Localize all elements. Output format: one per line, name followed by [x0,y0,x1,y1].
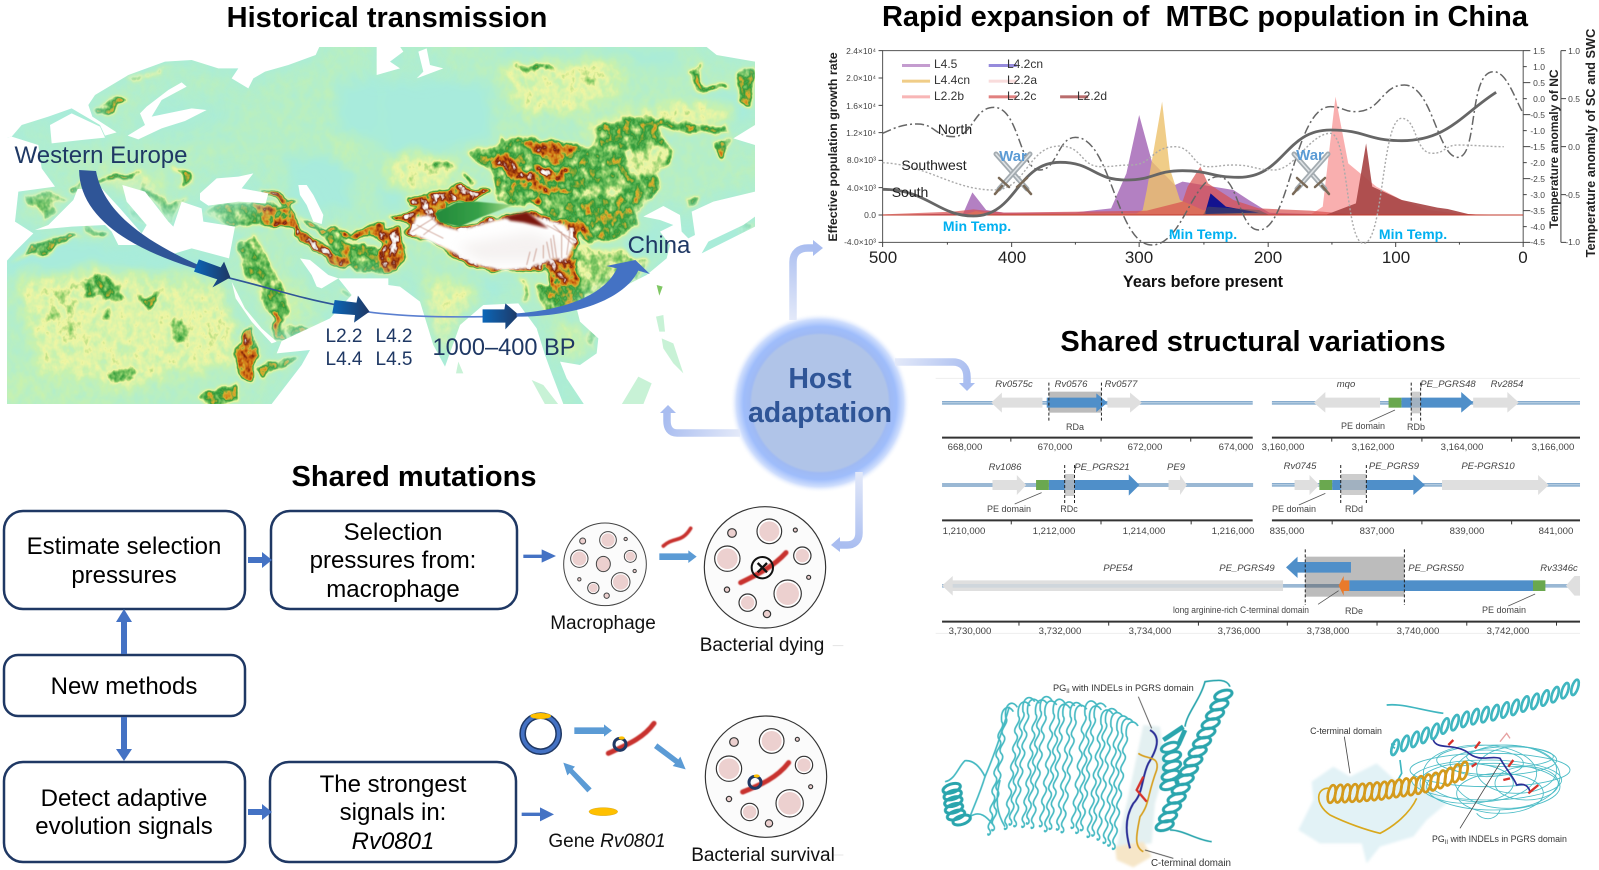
legend labels: L4.5 [934,57,958,71]
legend labels: L2.2a [1007,73,1037,87]
right axis 1 labels: 0.5 [1533,78,1545,88]
flow box: Selection pressures from macrophage: pressures from: [310,547,476,574]
coordinate labels: 3,738,000 [1307,626,1349,637]
coordinate labels: 3,166,000 [1532,442,1574,453]
northern brown block [505,212,548,228]
map label: Western Europe: Western Europe [14,142,188,169]
mint coastal bands [2,42,755,408]
oceans left half [2,42,388,408]
Tarim basin [435,202,513,227]
coordinate labels: 674,000 [1219,442,1253,453]
Iranian plateau [295,215,385,242]
coordinate labels: 1,210,000 [943,526,985,537]
surface blobs [1298,763,1447,863]
Balkans and Carpathians [137,187,185,225]
domain and region annotations: RDb [1407,422,1425,432]
legend labels [934,57,1107,103]
beta-coil strands [945,697,1138,849]
flow box: Estimate selection pressures: pressures [71,562,177,589]
gold C-terminal helix [1326,761,1469,804]
host adaptation text: Host [788,363,852,395]
block arrow 1 [194,259,230,287]
legend swatches [902,64,1088,98]
region label: Southwest: Southwest [901,157,967,173]
coordinate labels: 1,214,000 [1123,526,1165,537]
upper helix [1387,679,1580,785]
flow box: Estimate selection pressures: Estimate selection [27,533,221,560]
arrow: host to map [660,405,740,433]
islands of Southeast Asia [456,285,683,404]
flow arrow: box to box upper [248,552,272,568]
crossed swords 2 [1293,154,1329,194]
thin route line [228,278,485,317]
label pointers [1138,697,1173,858]
flow arrow: methods down [116,717,132,761]
coordinate labels: 1,216,000 [1212,526,1254,537]
coordinate labels: 3,734,000 [1129,626,1171,637]
right axis 1 labels [1530,46,1545,247]
left axis tick labels: -4.0×10³ [844,237,876,247]
gene names: Rv0577 [1105,379,1138,390]
Caucasus [258,189,300,206]
right axis 2 title: Temperature anomaly of SC and SWC [1583,29,1598,257]
left small helix [942,781,972,827]
gene names: PE-PGRS10 [1461,461,1515,472]
arrow to gene [522,807,554,821]
coordinate labels: 672,000 [1128,442,1162,453]
gene names: mqo [1337,379,1355,390]
zero line [883,214,1523,216]
right axis 2 labels [1565,46,1580,247]
left structure [942,680,1233,867]
x axis labels [869,248,1528,267]
coordinate labels: 3,736,000 [1218,626,1260,637]
title: Shared structural variations: Shared structural variations [1060,326,1446,358]
Anatolia [202,202,288,225]
gene names: PE_PGRS9 [1369,461,1420,472]
Karakoram fringe [390,205,437,223]
red residues [1448,740,1538,793]
right structure [1298,679,1580,863]
Yunnan and Burma [545,258,580,292]
label: PG with INDELs right: with INDELs in PGRS domain [1448,834,1567,844]
crossed swords 1 [995,154,1031,194]
coordinate labels: 668,000 [948,442,982,453]
flow box: The strongest signals [270,762,516,862]
domain and region annotations: PE domain [1272,504,1316,514]
Ethiopian highlands [232,322,260,382]
left axis tick labels: 8.0×10³ [847,155,876,165]
gene names: Rv3346c [1540,563,1578,574]
sweeping arrow from Western Europe [79,170,232,278]
flow box: New methods [4,655,245,716]
right axis 2 labels: -1.0 [1565,237,1580,247]
flow box: Selection pressures from macrophage: Selection [344,519,442,546]
right axis 1 labels: -3.0 [1530,190,1545,200]
chart: population growth rate and temperature anomaly [826,29,1598,291]
coordinate labels [943,442,1574,637]
left axis tick labels: 2.0×10⁴ [846,73,876,83]
Zagros [288,218,348,268]
Min Temp label 3: Min Temp. [1379,226,1447,242]
gene names: PE_PGRS49 [1219,563,1275,574]
Central China [577,195,640,242]
block arrow 3 [483,303,519,329]
Atlas [14,233,83,260]
gene names: PE_PGRS50 [1408,563,1464,574]
coordinate labels: 835,000 [1270,526,1304,537]
Siberian ranges [513,62,555,72]
coordinate labels: 3,162,000 [1352,442,1394,453]
Tibet and Tarim overlays [410,202,577,270]
right axis 1 labels: 0.0 [1533,94,1545,104]
oceans right half [377,42,755,408]
map label: lineages: L2.2 [326,326,362,347]
coordinate labels: 3,740,000 [1397,626,1439,637]
RDa [942,383,1253,421]
flow box: Selection pressures from macrophage [271,511,517,609]
left axis tick labels: 1.6×10⁴ [846,101,876,111]
broad lowland zones, left half [5,63,385,404]
right axis 1 labels: -3.5 [1530,206,1545,216]
Mongolia and north China highland [470,113,673,242]
left axis tick labels [844,46,876,247]
domain and region annotations: PE domain [1482,605,1526,615]
label: PG with INDELs left: PG [1053,683,1066,693]
legend labels: L2.2b [934,89,964,103]
legend labels: L4.4cn [934,73,970,87]
gold loop [1319,788,1417,833]
domain and region annotations: PE domain [1341,421,1385,431]
domain and region annotations: RDa [1066,422,1084,432]
map label: date: 1000–400 BP [432,334,576,361]
Min Temp label 1: Min Temp. [943,218,1011,234]
grey-white shading [457,232,567,262]
coordinate labels: 670,000 [1038,442,1072,453]
South China hills [570,242,647,298]
survival cell [705,716,827,837]
surface patches [1115,725,1165,867]
macrophage cell [564,523,646,606]
INDEL traces [1127,730,1157,852]
gene diagrams: structural variations [936,378,1580,637]
coordinate labels: 3,730,000 [949,626,991,637]
Altai and Hangai [482,153,557,188]
arrow to dying cell [659,550,697,563]
arrow: ring to bacterium [574,724,612,737]
coordinate labels: 839,000 [1450,526,1484,537]
Southwest temperature line [883,118,1504,243]
protein structures [942,679,1580,869]
right axis 1 labels: -4.0 [1530,222,1545,232]
x axis ticks and secondary axes [879,51,1566,247]
flow box: The strongest signals: The strongest [320,771,467,798]
terrain clip viewport [7,47,755,404]
coordinate labels: 3,732,000 [1039,626,1081,637]
left axis title: Effective population growth rate [826,52,840,242]
right axis 1 labels: -2.0 [1530,158,1545,168]
arrow: host to chart [793,240,823,320]
domain and region annotations: long arginine-rich C-terminal domain [1173,605,1309,615]
label: C-terminal left: C-terminal domain [1151,858,1231,869]
bacterium free [663,528,691,546]
flow box: Estimate selection pressures [4,511,245,609]
gene names: Rv0576 [1055,379,1088,390]
legend labels: L2.2d [1077,89,1107,103]
block arrow 2 [332,296,370,323]
map label: lineages [326,326,412,370]
label: PG with INDELs right: PG [1432,834,1445,844]
Scandinavian range [92,95,130,117]
x axis labels: 300 [1125,248,1153,267]
flow box: New methods: New methods [51,673,197,700]
left axis tick labels: 2.4×10⁴ [846,46,876,56]
faint side chain [1500,733,1510,742]
coordinate labels: 841,000 [1539,526,1573,537]
plasmid ring [523,713,559,752]
Saharan massifs [82,275,125,302]
white plateau [410,214,575,270]
gene names: Rv2854 [1491,379,1523,390]
left lobe strands [945,707,1009,782]
right axis 1 labels: 1.0 [1533,62,1545,72]
helix bundle [1155,680,1233,842]
title: Rapid expansion: Rapid expansion of MTBC population in China [882,1,1529,33]
domain and region annotations [987,421,1526,616]
right axis 2 labels: -0.5 [1565,190,1580,200]
domain and region annotations: RDd [1345,504,1363,514]
North temperature line [883,72,1523,245]
label: PG with INDELs left: with INDELs in PGRS domain [1070,683,1194,693]
right axis 1 title: Temperature anomaly of NC [1547,69,1561,229]
left axis tick labels: 4.0×10³ [847,183,876,193]
label: Bacterial dying: Bacterial dying [700,635,824,656]
label: PG with INDELs left: II [1066,689,1070,695]
map: Eurasia and Africa terrain with transmission route [0,0,820,450]
gene names: PPE54 [1103,563,1133,574]
widening arrow to China [517,260,650,317]
flow box: Selection pressures from macrophage: macrophage [326,576,460,603]
RDd [1272,465,1580,505]
elevation model rendered through colour ramp [0,0,820,450]
arrow: bacterium to survival cell [654,743,686,769]
host adaptation text: adaptation [748,397,892,429]
right half [380,50,754,362]
wire mesh [1410,745,1570,819]
Min Temp label 2: Min Temp. [1169,226,1237,242]
gene names [989,379,1578,574]
bacterium dying with cross [741,553,786,583]
map label: lineages: L4.4 [326,349,363,370]
label: PG with INDELs right: II [1445,840,1448,846]
Tien Shan [407,182,495,208]
domain and region annotations: PE domain [987,504,1031,514]
gene names: Rv0745 [1284,461,1317,472]
arrow: host to structural variations [895,362,975,391]
coordinate labels: 3,164,000 [1441,442,1483,453]
map label: China: China [628,232,691,259]
Alps [96,171,140,183]
frame lines [936,378,1580,633]
coordinate labels: 3,742,000 [1487,626,1529,637]
Hindu Kush and Pakistan [380,228,405,275]
plot frame [883,51,1523,242]
right axis 2 labels: 1.0 [1568,46,1580,56]
navy trace [1433,740,1530,792]
gene names: PE_PGRS21 [1074,462,1130,473]
gene names: PE9 [1167,462,1186,473]
flow arrow: box to box lower [248,804,272,820]
coordinate labels: 1,212,000 [1033,526,1075,537]
map label: lineages: L4.2 [376,326,412,347]
arrow: gene to ring [563,763,592,792]
right axis 1 labels: -1.0 [1530,126,1545,136]
flow box: The strongest signals: signals in: [340,799,446,826]
gene names: PE_PGRS48 [1420,379,1476,390]
right axis 2 labels: 0.5 [1568,94,1580,104]
flow box: Detect adaptive evolution signals: Detect adaptive [41,785,207,812]
scales row 1 [942,438,1580,442]
title: Historical transmission: Historical transmission [227,2,547,34]
RDc [942,465,1253,504]
War label 2: War [1296,147,1324,164]
bacterium with plasmid [608,723,654,753]
South temperature line [883,92,1496,216]
flow box: Detect adaptive evolution signals: evolution signals [35,813,213,840]
Tibet underlay [405,210,578,273]
label: C-terminal right: C-terminal domain [1310,726,1382,736]
flow box: Detect adaptive evolution signals [4,762,245,862]
right axis 1 labels: -0.5 [1530,110,1545,120]
host adaptation glow circle [730,313,910,493]
scales row 2 [942,520,1580,524]
x axis labels: 100 [1382,248,1410,267]
left axis tick labels: 0.0 [864,210,876,220]
Iberia [25,193,73,220]
War label 1: War [999,148,1027,165]
right axis 1 labels: -4.5 [1530,237,1545,247]
legend labels: L2.2c [1007,89,1036,103]
right axis 1 labels: -2.5 [1530,174,1545,184]
area series [883,97,1523,215]
region label: South: South [892,184,928,200]
plateau streaks [412,218,577,265]
scale row 3 [942,622,1580,626]
label: Macrophage: Macrophage [550,613,656,634]
x axis labels: 400 [998,248,1026,267]
gene names: Rv1086 [989,462,1022,473]
gene Rv0801 [589,808,618,816]
coordinate labels: 837,000 [1360,526,1394,537]
gene names: Rv0575c [995,379,1033,390]
label: Bacterial survival: Bacterial survival [691,845,835,866]
label pointers [1344,737,1500,828]
coordinate labels: 3,160,000 [1262,442,1304,453]
left axis tick labels: 1.2×10⁴ [846,128,876,138]
legend labels: L4.2cn [1007,57,1043,71]
x axis labels: 200 [1254,248,1282,267]
map label: lineages: L4.5 [376,349,412,370]
dying cell [704,507,826,628]
arrow to macrophage [523,549,556,563]
flow arrow: methods up [116,609,132,654]
domain and region annotations: RDc [1060,504,1078,514]
Arabian escarpment [237,237,292,342]
right axis 1 labels: 1.5 [1533,46,1545,56]
RDb [1272,383,1580,422]
region label: North: North [938,121,972,137]
domain and region annotations: RDe [1345,606,1363,616]
label: Gene Rv0801: Gene Rv0801 [548,831,666,852]
x axis labels: 500 [869,248,897,267]
flow box: The strongest signals: Rv0801 [352,828,434,855]
arrow: host to bacterial dying [831,472,859,552]
cell diagrams [522,507,843,866]
right axis 1 labels: -1.5 [1530,142,1545,152]
title: Shared mutations: Shared mutations [292,461,536,493]
bacterium surviving [743,763,789,792]
Greater Khingan and steppe [628,145,668,175]
x axis title: Years before present [1123,273,1284,291]
right axis 2 labels: 0.0 [1568,142,1580,152]
x axis labels: 0 [1518,248,1528,267]
route arrows layer [79,170,650,329]
East African highlands [198,383,238,404]
faint marks [833,646,843,855]
RDe [942,549,1580,606]
Stanovoy arc [597,113,727,145]
